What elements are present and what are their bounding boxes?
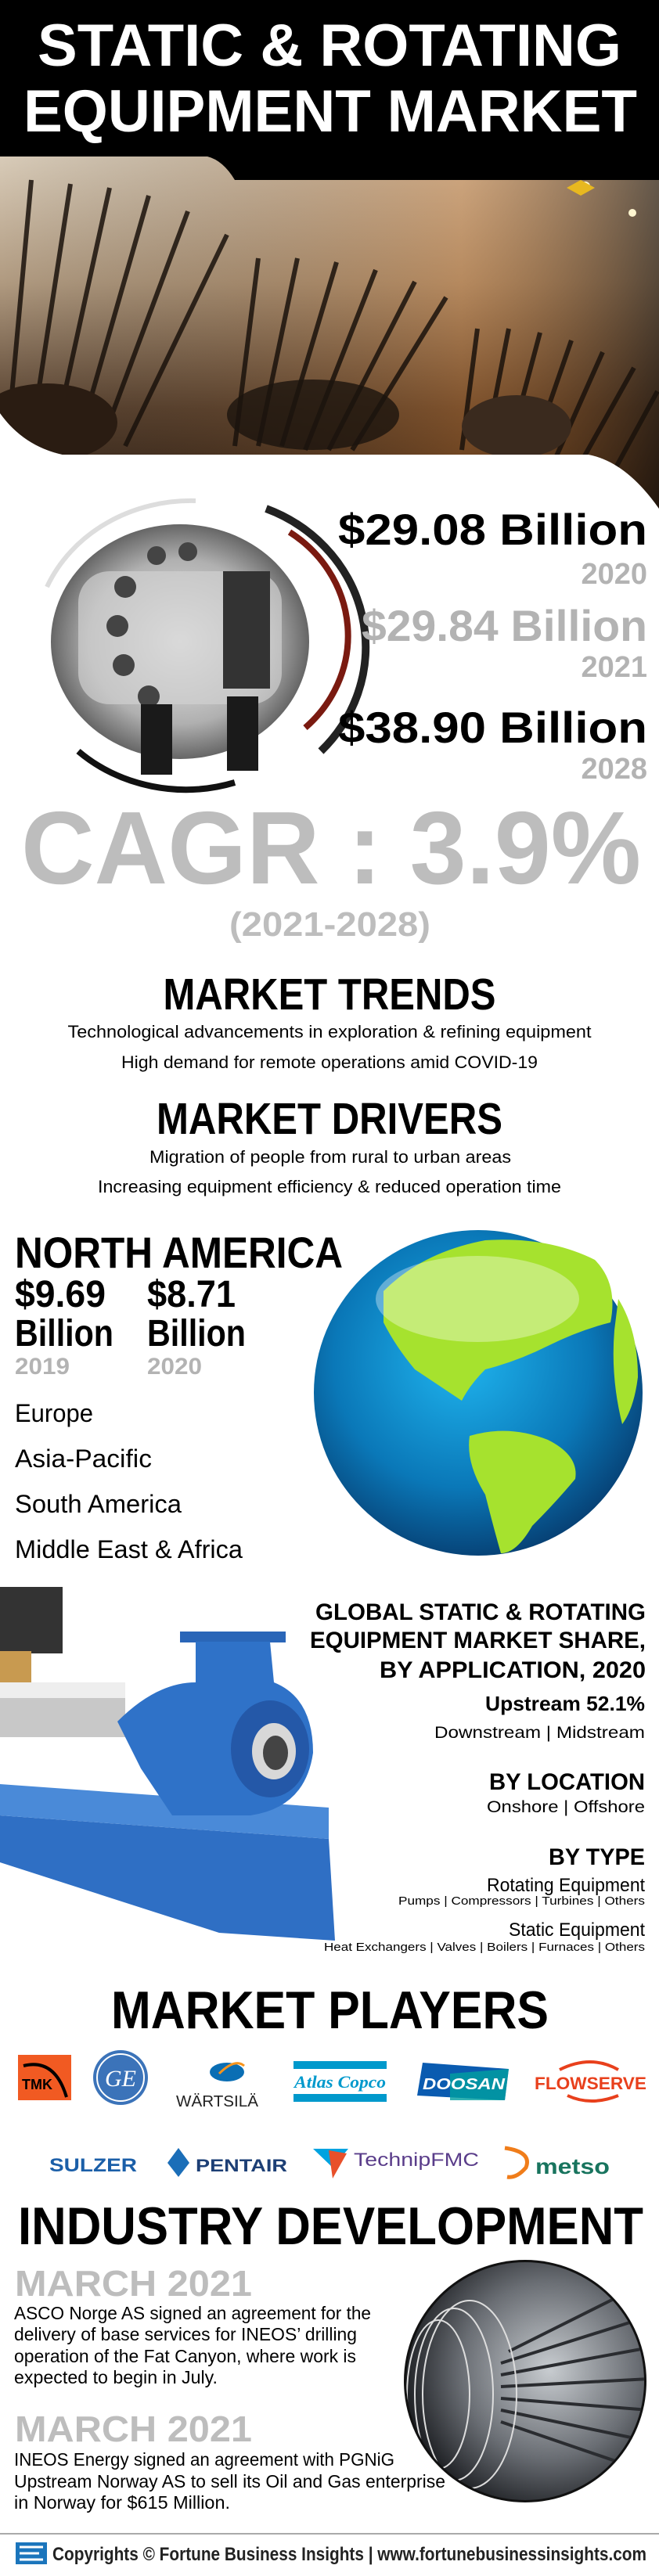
logo: TechnipFMC [313,2149,479,2178]
logo: Flowserve [535,2062,646,2101]
market trends [67,970,592,1072]
development 1: MARCH 2021 [15,2263,252,2304]
image: centrifugal pump [0,1587,335,1941]
logo: TMK: TMK [22,2077,52,2092]
market share by application [310,1599,646,1742]
market share by application: BY APPLICATION, 2020 [380,1657,646,1683]
market trends: Technological advancements in exploration & refining equipment [67,1022,592,1042]
market size values: 2021 [581,651,647,684]
by type: Heat Exchangers | Valves | Boilers | Furnaces | Others [324,1941,645,1954]
market size values: 2028 [581,753,647,786]
by location: BY LOCATION [489,1769,645,1795]
title [23,13,637,145]
by type [324,1844,645,1954]
other regions list [15,1399,243,1563]
by type: Rotating Equipment [487,1875,645,1896]
development 2: Upstream Norway AS to sell its Oil and Gas enterprise [14,2471,445,2491]
regional: north america: $9.69 [15,1274,106,1315]
logo: metso: metso [535,2154,610,2178]
title: EQUIPMENT MARKET [23,78,637,145]
logo: GE [93,2050,148,2105]
logo: Wartsila [176,2063,259,2110]
regional: north america: 2020 [147,1354,202,1380]
logo: Atlas Copco [293,2061,387,2102]
logo: Atlas Copco: Atlas Copco [293,2072,386,2092]
development 1: ASCO Norge AS signed an agreement for the [14,2303,371,2323]
icon: FBI logo [16,2542,47,2564]
image: gas turbine engine with rings [47,501,366,790]
development 2: MARCH 2021 [15,2409,252,2449]
market drivers: Migration of people from rural to urban areas [149,1147,511,1167]
market drivers [98,1094,561,1196]
logo: TMK [18,2055,71,2100]
logo: Flowserve: FLOWSERVE [535,2074,646,2093]
market drivers: MARKET DRIVERS [157,1094,502,1144]
logo: metso [505,2148,610,2178]
header photo: turbine [0,157,659,516]
by type: Pumps | Compressors | Turbines | Others [398,1894,645,1908]
logo: Doosan: DOOSAN [423,2076,506,2093]
development 1: operation of the Fat Canyon, where work is [14,2346,356,2366]
market share by application: Downstream | Midstream [434,1724,645,1742]
by location [487,1769,645,1816]
market size values: $29.08 Billion [338,505,647,554]
logo: Pentair [167,2148,287,2177]
logo: Wartsila: WÄRTSILÄ [176,2093,259,2110]
market players heading: MARKET PLAYERS [111,1981,549,2040]
regional: north america: Billion [15,1313,113,1355]
logo: TechnipFMC: TechnipFMC [354,2150,479,2171]
logo: GE: GE [105,2066,136,2092]
logos [18,2050,646,2178]
regional: north america: $8.71 [147,1274,236,1315]
image: turbine rotor circle [403,2260,650,2504]
icon: globe [314,1230,643,1556]
development 2: INEOS Energy signed an agreement with PGNiG [14,2449,394,2470]
by location: Onshore | Offshore [487,1798,645,1816]
regional: north america: 2019 [15,1354,70,1380]
title bar [0,0,659,180]
by type: Static Equipment [509,1919,645,1941]
logo: Sulzer: SULZER [49,2155,137,2176]
regional: north america: Billion [147,1313,246,1355]
CAGR: (2021-2028) [229,905,430,944]
other regions list: South America [15,1490,182,1518]
regional: north america [15,1228,343,1380]
development 1: delivery of base services for INEOS’ drilling [14,2324,357,2344]
other regions list: Asia-Pacific [15,1445,152,1473]
market size values: 2020 [581,558,647,591]
title: STATIC & ROTATING [38,13,621,79]
market share by application: Upstream 52.1% [485,1692,645,1715]
development 1: expected to begin in July. [14,2367,218,2387]
logo: Doosan [417,2063,509,2100]
market size values: $38.90 Billion [338,703,647,752]
development 2 [14,2409,445,2513]
market share by application: GLOBAL STATIC & ROTATING [315,1599,646,1625]
development 2: in Norway for $615 Million. [14,2492,230,2513]
CAGR: CAGR : 3.9% [21,790,641,905]
other regions list: Europe [15,1399,93,1427]
market trends: High demand for remote operations amid COVID-19 [121,1052,538,1072]
by type: BY TYPE [549,1844,645,1870]
market size values [338,505,647,786]
market size values: $29.84 Billion [362,601,647,650]
market drivers: Increasing equipment efficiency & reduced operation time [98,1177,561,1196]
regional: north america: NORTH AMERICA [15,1228,343,1277]
logo: Pentair: PENTAIR [196,2156,287,2175]
market trends: MARKET TRENDS [163,970,496,1020]
other regions list: Middle East & Africa [15,1535,243,1563]
development 1 [14,2263,371,2387]
market share by application: EQUIPMENT MARKET SHARE, [310,1628,646,1653]
